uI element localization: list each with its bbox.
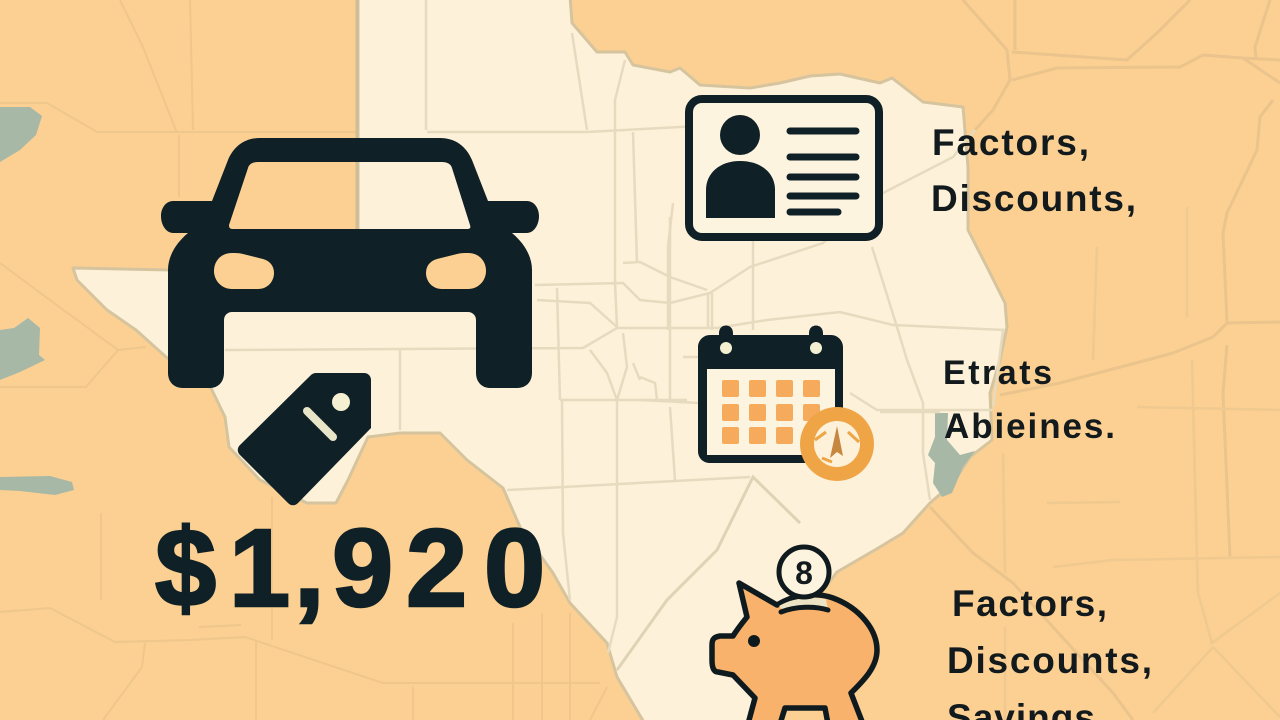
label: factors and discounts: Factors, (932, 122, 1089, 163)
icon: price tag (238, 373, 371, 505)
label: factors and discounts (931, 122, 1136, 219)
road network (225, 0, 1005, 670)
lakes (0, 107, 74, 495)
icon: calendar with badge (698, 326, 874, 481)
icon: car right headlight (426, 253, 486, 289)
label: garbled second text: Etrats (943, 354, 1052, 392)
label: factors, discounts, savings (947, 583, 1152, 720)
label: factors, discounts, savings: Factors, (952, 583, 1107, 624)
icon: car (161, 138, 539, 388)
Texas state shape (73, 0, 1007, 720)
icon: ID card (689, 99, 879, 237)
price figure: $1,920 (155, 507, 545, 630)
label: garbled second text: Abieines. (944, 407, 1115, 446)
icon: piggy bank: 8 (795, 555, 813, 591)
label: factors, discounts, savings: Discounts, (947, 640, 1152, 681)
icon: piggy bank (712, 547, 877, 720)
label: garbled second text (943, 354, 1115, 446)
label: factors and discounts: Discounts, (931, 178, 1136, 219)
icon: car left headlight (214, 253, 274, 289)
bay water (928, 413, 975, 497)
